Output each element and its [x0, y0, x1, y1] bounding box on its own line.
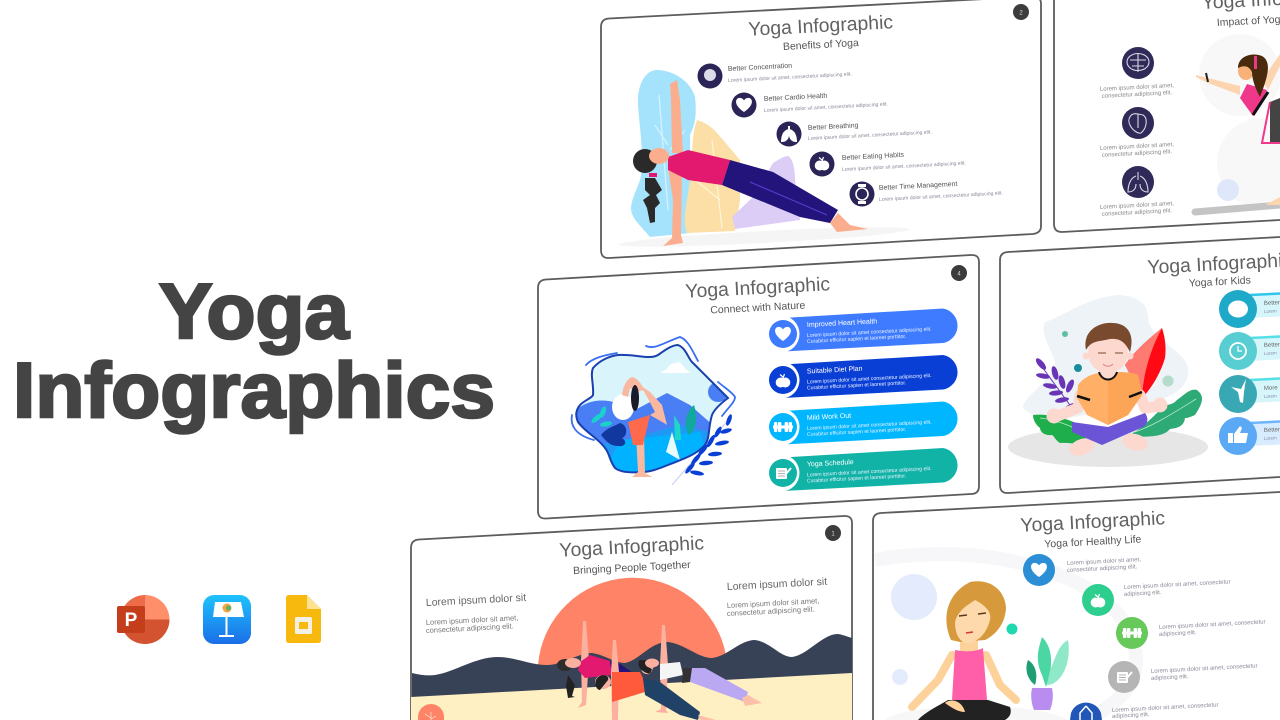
page badge [951, 265, 967, 281]
pill: Suitable Diet Plan [762, 355, 958, 398]
list: four kids benefits [1219, 290, 1280, 455]
list: five benefits: Lorem ipsum dolor sit amet, consectetur adipiscing elit. [808, 130, 932, 142]
list: five health items: Lorem ipsum dolor sit amet, consectetur [1159, 619, 1266, 631]
pill: Improved Heart Health: Curabitur efficitur sapien et laoreet porttitor. [807, 334, 906, 345]
list: five health items: Lorem ipsum dolor sit amet, consectetur [1112, 702, 1219, 714]
pill: Suitable Diet Plan: Curabitur efficitur sapien et laoreet porttitor. [807, 380, 906, 391]
page badge: 1 [831, 532, 835, 538]
list: five benefits: Better Concentration [728, 63, 792, 73]
pill: Yoga Schedule: Lorem ipsum dolor sit amet consectetur adipiscing elit. [807, 466, 932, 478]
illustration: dancer pose in nature blob [570, 337, 735, 485]
list: five benefits: Lorem ipsum dolor sit amet, consectetur adipiscing elit. [879, 191, 1003, 203]
list: five health items: Lorem ipsum dolor sit amet, consectetur [1151, 663, 1258, 675]
pill: Improved Heart Health: Improved Heart Health [807, 318, 878, 329]
list: three impact items [1100, 47, 1174, 218]
panel: Connect with Nature slide [538, 255, 979, 519]
list: five health items: adipiscing elit. [1112, 712, 1150, 720]
list: three impact items: Lorem ipsum dolor sit amet, [1100, 142, 1174, 152]
text block: left [426, 592, 526, 635]
heading: slide title: Yoga Infographic [685, 273, 831, 303]
pill: Suitable Diet Plan: Lorem ipsum dolor sit amet consectetur adipiscing elit. [807, 373, 932, 385]
pill: Improved Heart Health [762, 308, 958, 352]
page badge: 2 [1019, 10, 1023, 16]
illustration: standing yoga woman [1195, 34, 1280, 212]
text block: left: Lorem ipsum dolor sit amet, [426, 613, 519, 627]
panel: Bringing People Together slide [411, 516, 852, 720]
heading: slide title: Yoga Infographic [748, 11, 894, 41]
pill: Yoga Schedule: Curabitur efficitur sapien et laoreet porttitor. [807, 473, 906, 484]
pill: Mild Work Out: Curabitur efficitur sapien et laoreet porttitor. [807, 427, 906, 438]
list: five health items: adipiscing elit. [1159, 630, 1197, 638]
list: three impact items: consectetur adipiscing elit. [1102, 208, 1173, 218]
list: five benefits: Lorem ipsum dolor sit amet, consectetur adipiscing elit. [728, 72, 852, 84]
pill: Mild Work Out: Mild Work Out [807, 413, 851, 422]
pill: Mild Work Out: Lorem ipsum dolor sit amet consectetur adipiscing elit. [807, 419, 932, 432]
panel: Yoga for Healthy Life slide [873, 492, 1280, 720]
pill: Mild Work Out [762, 402, 958, 446]
list: four kids benefits: Lorem [1264, 435, 1277, 441]
icon: PowerPoint: P [125, 610, 138, 631]
list: four coloured pills [762, 308, 958, 492]
illustration: side plank woman on leaves [618, 70, 910, 251]
text block: left: consectetur adipiscing elit. [426, 621, 514, 635]
heading: slide title: Yoga Infographic [559, 532, 705, 562]
pill: Suitable Diet Plan: Suitable Diet Plan [807, 366, 863, 375]
heading: slide title: Yoga Infographic [1020, 507, 1166, 537]
text block: right [727, 576, 827, 618]
list: five benefits: Lorem ipsum dolor sit amet, consectetur adipiscing elit. [764, 102, 888, 114]
list: three impact items: Lorem ipsum dolor sit amet, [1100, 83, 1174, 93]
list: three impact items: consectetur adipiscing elit. [1102, 149, 1173, 159]
subheading: Connect with Nature [710, 300, 806, 316]
list: five benefits: Lorem ipsum dolor sit amet, consectetur adipiscing elit. [842, 161, 966, 173]
page badge: 4 [957, 272, 961, 278]
text block: right: Lorem ipsum dolor sit amet, [727, 596, 820, 610]
list: five health items: adipiscing elit. [1151, 674, 1189, 682]
list: four kids benefits: Lorem [1264, 393, 1277, 399]
pill: Yoga Schedule [762, 448, 958, 492]
illustration: sunset landscape with three yogis [411, 578, 852, 720]
list: five benefits: Better Eating Habits [842, 152, 905, 162]
illustration: meditating boy [1008, 295, 1208, 467]
icon: PowerPoint [117, 595, 170, 644]
subheading: Yoga for Healthy Life [1044, 533, 1142, 551]
list: four kids benefits: Lorem [1264, 350, 1277, 356]
title: Yoga Infographics: Yoga [159, 267, 350, 355]
subheading: Benefits of Yoga [783, 37, 859, 53]
list: three impact items: Lorem ipsum dolor sit amet, [1100, 201, 1174, 211]
list: five benefits: Better Cardio Health [764, 93, 828, 103]
list: five health items: adipiscing elit. [1124, 590, 1162, 598]
list: five health items: Lorem ipsum dolor sit amet, [1067, 557, 1141, 567]
pill: Yoga Schedule: Yoga Schedule [807, 459, 854, 468]
page badge [1013, 4, 1029, 20]
pill: Improved Heart Health: Lorem ipsum dolor sit amet consectetur adipiscing elit. [807, 326, 932, 339]
list: five benefits [698, 63, 1003, 206]
icon: Google Slides [286, 595, 321, 643]
panel: Benefits of Yoga slide [601, 0, 1041, 258]
panel: Impact of Yoga slide [1054, 0, 1280, 232]
list: five health items [1023, 554, 1266, 720]
text block: left: Lorem ipsum dolor sit [426, 592, 526, 609]
title: Yoga Infographics [13, 267, 495, 434]
list: four kids benefits: More [1264, 385, 1278, 392]
list: four kids benefits: Lorem [1264, 308, 1277, 314]
subheading: Yoga for Kids [1189, 274, 1251, 290]
page badge [825, 525, 841, 541]
list: four kids benefits: Better [1264, 342, 1280, 349]
list: five health items: consectetur adipiscing elit. [1067, 564, 1138, 574]
icon: Keynote [203, 595, 251, 644]
list: four kids benefits: Better [1264, 427, 1280, 434]
list: three impact items: consectetur adipiscing elit. [1102, 90, 1173, 100]
list: five health items: Lorem ipsum dolor sit amet, consectetur [1124, 579, 1231, 591]
text block: right: Lorem ipsum dolor sit [727, 576, 827, 593]
illustration: meditating woman with plant [875, 554, 1136, 720]
list: five benefits: Better Breathing [808, 122, 859, 132]
title: Yoga Infographics: Infographics [13, 346, 495, 434]
text block: right: consectetur adipiscing elit. [727, 604, 815, 618]
list: four kids benefits: Better [1264, 300, 1280, 307]
list: five benefits: Better Time Management [879, 181, 958, 192]
subheading: Bringing People Together [573, 559, 691, 577]
panel: Yoga for Kids slide [1000, 237, 1280, 493]
